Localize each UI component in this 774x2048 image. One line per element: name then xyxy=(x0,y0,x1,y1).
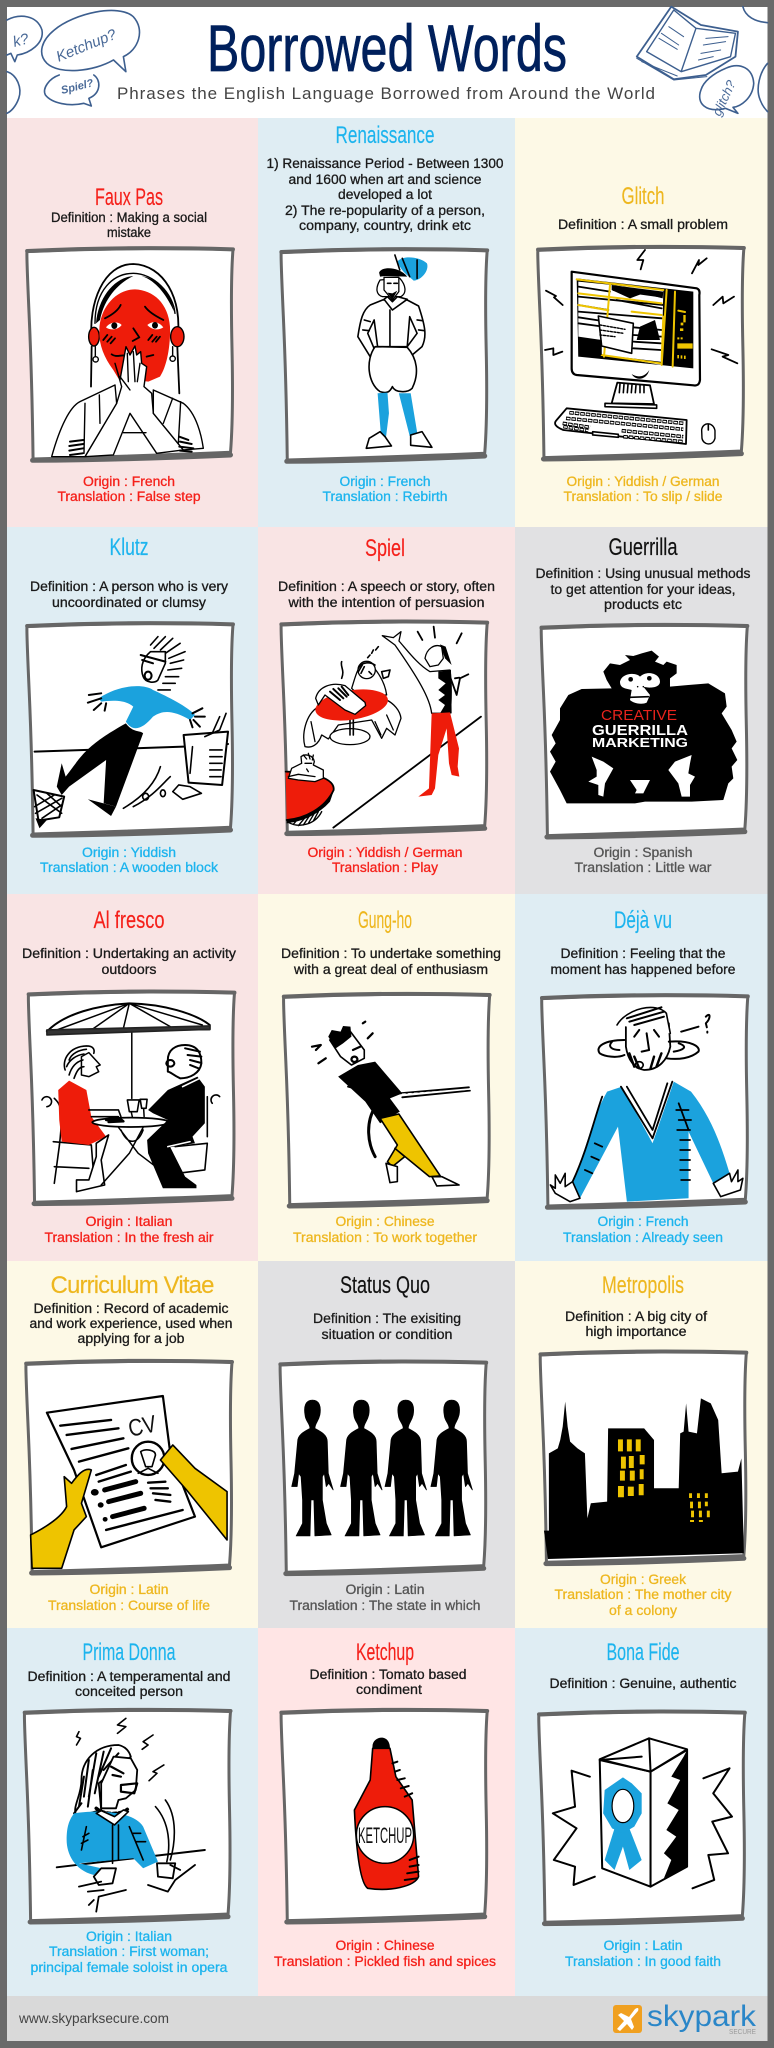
origin and translation: Origin : Italian xyxy=(86,1214,172,1229)
definition: developed a lot xyxy=(338,187,432,202)
definition: and work experience, used when xyxy=(30,1316,232,1331)
definition: 2) The re-popularity of a person, xyxy=(285,203,485,218)
definition: Definition : Genuine, authentic xyxy=(550,1676,737,1691)
origin and translation: Origin : Chinese xyxy=(336,1938,434,1953)
origin and translation: Origin : Italian xyxy=(86,1929,172,1944)
definition: to get attention for your ideas, xyxy=(550,582,736,597)
heading: spiel: Spiel xyxy=(365,535,405,562)
origin and translation: Origin : Chinese xyxy=(336,1214,434,1229)
logo: skypark xyxy=(613,2000,757,2036)
definition: and 1600 when art and science xyxy=(288,172,482,187)
definition: Definition : The exisiting xyxy=(313,1311,461,1326)
heading: guerrilla: Guerrilla xyxy=(608,534,678,561)
illustration: hands holding a CV xyxy=(26,1361,232,1573)
origin and translation: Translation : A wooden block xyxy=(40,860,218,875)
panel: spiel xyxy=(258,527,515,894)
panel: faux pas xyxy=(7,118,258,527)
panel: al fresco xyxy=(7,894,258,1261)
definition: Definition : Undertaking an activity xyxy=(22,946,236,961)
panel: metropolis xyxy=(515,1261,768,1628)
illustration: couple at outdoor table xyxy=(28,991,234,1204)
panel: renaissance xyxy=(258,118,515,527)
panel: ketchup xyxy=(258,1628,515,1996)
heading: faux pas: Faux Pas xyxy=(95,184,163,211)
cv lettering: CV xyxy=(126,1411,159,1443)
doodles: speech bubbles and book xyxy=(7,7,768,113)
gorilla text: MARKETING xyxy=(592,735,688,750)
definition: mistake xyxy=(107,225,151,240)
origin and translation: Translation : The mother city xyxy=(554,1587,732,1602)
heading: metropolis: Metropolis xyxy=(602,1272,684,1299)
definition: 1) Renaissance Period - Between 1300 xyxy=(266,156,504,171)
origin and translation: Translation : False step xyxy=(58,489,200,504)
panel: guerrilla xyxy=(515,527,768,894)
doodle words xyxy=(11,26,739,118)
illustration: glitching computer xyxy=(538,247,744,459)
origin and translation: principal female soloist in opera xyxy=(30,1960,228,1975)
illustration: renaissance man xyxy=(281,249,487,461)
origin and translation: Translation : Rebirth xyxy=(322,489,448,504)
illustration: clumsy person tripping xyxy=(27,623,233,835)
heading: deja vu: Déjà vu xyxy=(614,907,672,934)
origin and translation: Translation : To work together xyxy=(293,1230,478,1245)
origin and translation: Translation : Course of life xyxy=(48,1598,210,1613)
definition: Definition : A temperamental and xyxy=(28,1669,230,1684)
doodle words: Ketchup? xyxy=(54,26,119,66)
illustration: four silhouettes xyxy=(280,1361,486,1574)
heading: curriculum vitae: Curriculum Vitae xyxy=(50,1272,214,1299)
origin and translation: Translation : The state in which xyxy=(290,1598,480,1613)
definition: products etc xyxy=(604,597,682,612)
illustration: box with rosette xyxy=(539,1711,745,1924)
illustration: embarrassed woman xyxy=(27,248,233,460)
definition: company, country, drink etc xyxy=(299,218,471,233)
definition: applying for a job xyxy=(78,1331,184,1346)
origin and translation: Origin : French xyxy=(340,474,430,489)
panel: klutz xyxy=(7,527,258,894)
heading: bona fide: Bona Fide xyxy=(606,1639,680,1666)
origin and translation: Origin : Latin xyxy=(604,1938,682,1953)
header xyxy=(7,7,768,118)
origin and translation: of a colony xyxy=(609,1603,677,1618)
bottle label text: KETCHUP xyxy=(358,1823,412,1848)
footer xyxy=(7,1996,768,2041)
origin and translation: Origin : Yiddish / German xyxy=(566,474,720,489)
illustration: confused man xyxy=(542,995,748,1207)
definition: Definition : A speech or story, often xyxy=(278,579,495,594)
definition: situation or condition xyxy=(322,1327,452,1342)
panel: gung-ho xyxy=(258,894,515,1261)
heading: renaissance: Renaissance xyxy=(336,122,434,149)
panel: curriculum vitae xyxy=(7,1261,258,1628)
definition: Definition : A big city of xyxy=(565,1309,707,1324)
origin and translation: Origin : Greek xyxy=(600,1572,686,1587)
panel: deja vu xyxy=(515,894,768,1261)
panel: status quo xyxy=(258,1261,515,1628)
heading: prima donna: Prima Donna xyxy=(82,1639,176,1666)
heading: glitch: Glitch xyxy=(622,183,664,210)
origin and translation: Translation : In the fresh air xyxy=(44,1230,214,1245)
logo: skypark: SECURE xyxy=(729,2029,756,2036)
origin and translation: Origin : French xyxy=(83,474,175,489)
definition: Definition : To undertake something xyxy=(281,946,501,961)
illustration: speaker bores cafe customers xyxy=(281,621,487,834)
heading: ketchup: Ketchup xyxy=(356,1639,414,1666)
definition: Definition : A small problem xyxy=(558,217,728,232)
heading: gung-ho: Gung-ho xyxy=(358,907,412,934)
definition: Definition : A person who is very xyxy=(30,579,228,594)
definition: outdoors xyxy=(102,962,157,977)
definition: Definition : Record of academic xyxy=(34,1301,229,1316)
definition: condiment xyxy=(356,1682,422,1697)
title: Borrowed Words xyxy=(207,11,567,85)
origin and translation: Origin : Latin xyxy=(90,1582,168,1597)
doodle words: glitch? xyxy=(709,77,739,118)
definition: Definition : Tomato based xyxy=(310,1667,466,1682)
origin and translation: Origin : French xyxy=(598,1214,688,1229)
definition: with the intention of persuasion xyxy=(287,595,484,610)
definition: with a great deal of enthusiasm xyxy=(293,962,488,977)
panel: glitch xyxy=(515,118,768,527)
definition: high importance xyxy=(586,1324,686,1339)
origin and translation: Origin : Yiddish xyxy=(82,845,176,860)
panel: bona fide xyxy=(515,1628,768,1996)
origin and translation: Origin : Latin xyxy=(346,1582,424,1597)
logo: skypark: skypark xyxy=(647,2000,757,2033)
origin and translation: Translation : In good faith xyxy=(565,1954,721,1969)
heading: status quo: Status Quo xyxy=(340,1272,430,1299)
origin and translation: Translation : To slip / slide xyxy=(564,489,722,504)
definition: conceited person xyxy=(75,1684,183,1699)
origin and translation: Origin : Spanish xyxy=(594,845,692,860)
doodle words: Spiel? xyxy=(60,77,95,97)
origin and translation: Translation : Play xyxy=(332,860,438,875)
origin and translation: Translation : Little war xyxy=(574,860,712,875)
definition: uncoordinated or clumsy xyxy=(52,595,206,610)
definition: Definition : Making a social xyxy=(51,210,207,225)
doodle words: k? xyxy=(11,30,31,51)
origin and translation: Translation : First woman; xyxy=(49,1944,209,1959)
illustration: man pulling rope xyxy=(284,994,490,1206)
heading: al fresco: Al fresco xyxy=(94,907,164,934)
illustration: city skyline xyxy=(540,1351,746,1564)
definition: Definition : Using unusual methods xyxy=(536,566,751,581)
origin and translation: Translation : Pickled fish and spices xyxy=(274,1954,496,1969)
definition: moment has happened before xyxy=(550,962,736,977)
illustration: angry singer xyxy=(24,1710,231,1922)
subtitle: Phrases the English Language Borrowed from Around the World xyxy=(117,84,655,103)
gorilla text: GUERRILLA xyxy=(592,722,688,739)
origin and translation: Origin : Yiddish / German xyxy=(308,845,462,860)
panel: prima donna xyxy=(7,1628,258,1996)
illustration: ketchup bottle xyxy=(281,1710,487,1922)
gorilla text: CREATIVE xyxy=(601,707,677,724)
website address: www.skyparksecure.com xyxy=(18,2010,169,2026)
definition: Definition : Feeling that the xyxy=(560,946,726,961)
origin and translation: Translation : Already seen xyxy=(563,1230,723,1245)
illustration: gorilla logo xyxy=(541,625,747,837)
heading: klutz: Klutz xyxy=(110,534,148,561)
